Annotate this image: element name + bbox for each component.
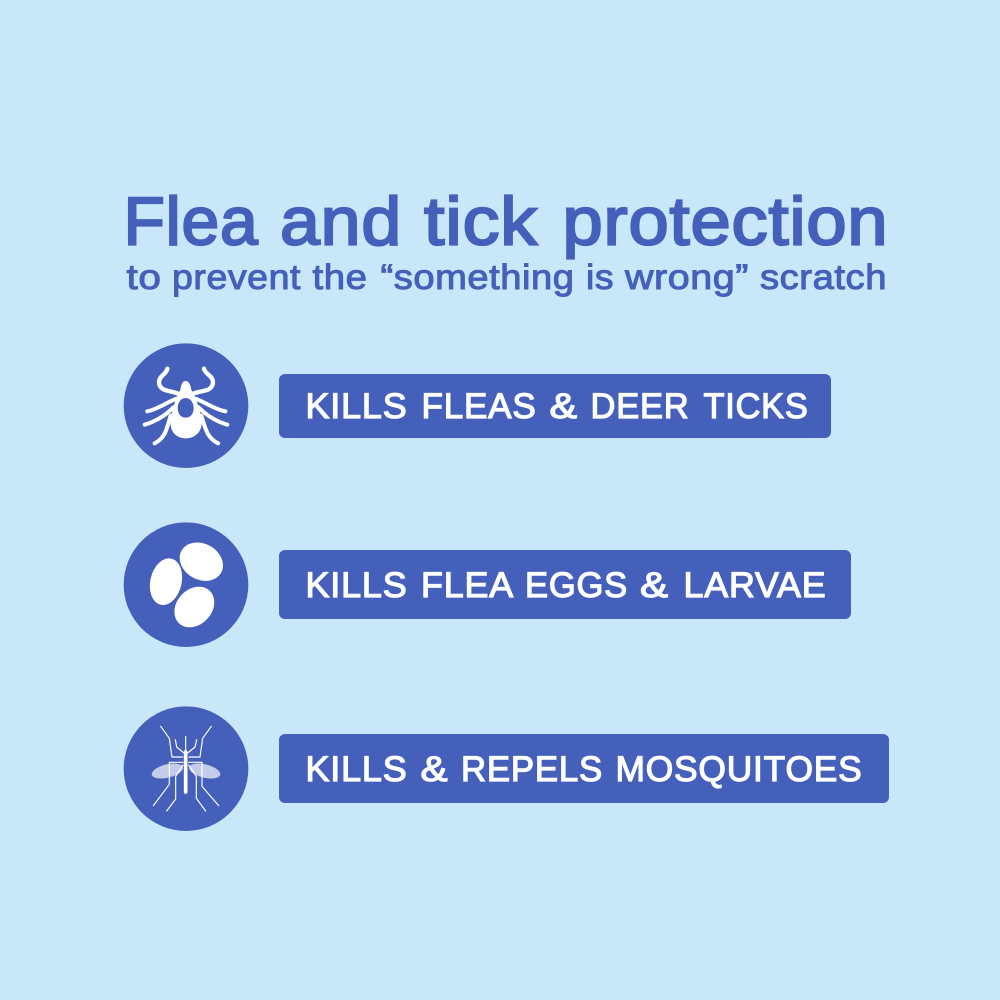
title: protection [562, 184, 888, 260]
label: kills fleas and deer ticks [279, 374, 831, 438]
label: kills fleas and deer ticks: TICKS [704, 387, 808, 426]
subtitle: the [312, 258, 368, 297]
label: kills fleas and deer ticks: FLEAS [422, 387, 536, 426]
label: kills and repels mosquitoes: MOSQUITOES [616, 750, 862, 789]
icon: tick [124, 343, 248, 468]
title: tick [424, 184, 538, 260]
title: Flea [124, 184, 258, 260]
icon: flea eggs [124, 522, 248, 647]
label: kills flea eggs and larvae: FLEA [421, 566, 514, 605]
subtitle: to [126, 258, 162, 297]
icon: mosquito [124, 706, 248, 831]
label: kills fleas and deer ticks: KILLS [306, 387, 408, 426]
label: kills fleas and deer ticks: & [550, 387, 578, 426]
label: kills and repels mosquitoes: KILLS [306, 750, 408, 789]
label: kills fleas and deer ticks: DEER [590, 387, 690, 426]
subtitle: “something [380, 258, 574, 297]
subtitle [126, 258, 887, 297]
title [124, 184, 888, 260]
label: kills and repels mosquitoes: & [420, 750, 448, 789]
label: kills flea eggs and larvae: & [640, 566, 669, 605]
subtitle: scratch [760, 258, 887, 297]
label: kills flea eggs and larvae: LARVAE [684, 566, 826, 605]
subtitle: is [586, 258, 614, 297]
label: kills and repels mosquitoes [279, 734, 889, 803]
subtitle: wrong” [624, 258, 749, 297]
label: kills and repels mosquitoes: REPELS [461, 750, 603, 789]
subtitle: prevent [172, 258, 301, 297]
label: kills flea eggs and larvae: KILLS [306, 566, 408, 605]
label: kills flea eggs and larvae [279, 550, 851, 619]
label: kills flea eggs and larvae: EGGS [525, 566, 628, 605]
title: and [280, 184, 402, 260]
